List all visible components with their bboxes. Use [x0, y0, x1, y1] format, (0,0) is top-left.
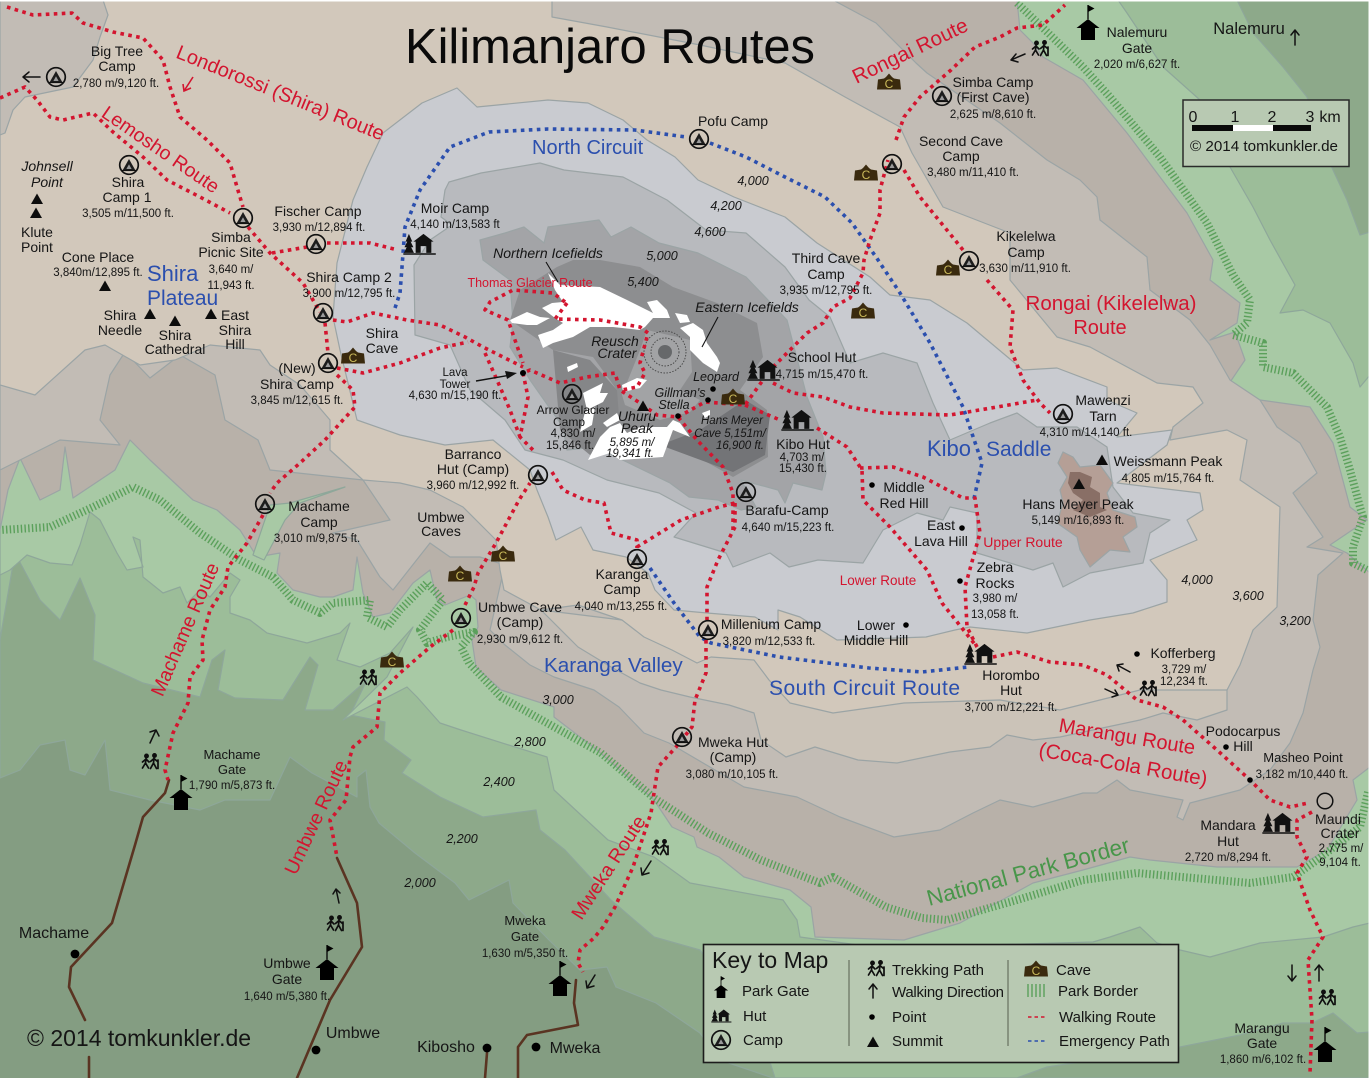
route names: Lemosho Route: [97, 102, 223, 198]
camp: Big Tree: 2,780 m/9,120 ft.: [73, 78, 159, 90]
camp: Arrow Glacier: 15,846 ft.: [546, 440, 594, 452]
label: Reusch Crater: Reusch: [591, 333, 639, 349]
camp: Kikelelwa: 3,630 m/11,910 ft.: [979, 263, 1071, 275]
camp: New Shira Camp: 3,845 m/12,615 ft.: [251, 395, 343, 407]
peak: East Shira Hill: Shira: [219, 322, 252, 338]
camp: Barafu: [737, 483, 834, 534]
point: Masheo Point: Masheo Point: [1263, 750, 1343, 765]
caves: Umbwe Caves: [417, 509, 515, 583]
camp: Second Cave: Second Cave: [919, 133, 1003, 149]
camp: New Shira Camp: Shira Camp: [260, 376, 334, 392]
point: Lower Middle Hill: Middle Hill: [844, 632, 908, 648]
peak: Weissmann: 4,805 m/15,764 ft.: [1122, 473, 1214, 485]
key: park gate: Park Gate: [742, 983, 810, 1000]
point: Zebra Rocks: 3,980 m/: [973, 593, 1018, 605]
peak: Shira Cathedral: Cathedral: [145, 341, 205, 357]
caves: Umbwe Caves: C: [499, 549, 508, 563]
route names: Lower Route: [840, 573, 916, 588]
camp: Mweka Hut: [673, 728, 778, 781]
point: East Lava Hill: [914, 517, 968, 549]
key to map panel: Key to Map: [712, 947, 828, 973]
point: Kofferberg: 3,729 m/: [1162, 664, 1207, 676]
scale bar panel: km: [1319, 109, 1341, 126]
peak: East Shira Hill: [205, 307, 252, 352]
camp: Fischer: 3,930 m/12,894 ft.: [273, 222, 365, 234]
route names: Mweka Route: [567, 812, 651, 924]
route names: Upper Route: [983, 534, 1063, 550]
town: Machame: [19, 925, 89, 958]
point: East Lava Hill: Lava Hill: [914, 533, 968, 549]
camp: Shira Camp 2: [303, 269, 395, 322]
camp: Simba Picnic Site: Simba: [211, 229, 251, 245]
key: park border: Park Border: [1058, 983, 1138, 1000]
camp: Third Cave: Third Cave: [792, 250, 860, 266]
camp: Arrow Glacier: Camp: [553, 415, 585, 429]
camp: Machame: Machame: [288, 498, 350, 514]
gate: Marangu: Gate: [1247, 1035, 1277, 1051]
altitude labels: 2,000: [403, 876, 436, 890]
point: Middle Red Hill: Middle: [883, 479, 925, 495]
point: Middle Red Hill: [869, 479, 929, 511]
route names: Umbwe Route: [280, 757, 353, 878]
altitude labels: 4,000: [737, 174, 769, 188]
crater: Maundi: 9,104 ft.: [1319, 857, 1361, 869]
hut: Horombo: 3,700 m/12,221 ft.: [965, 702, 1057, 714]
gate: Mweka: [482, 913, 595, 996]
camp: Simba Picnic Site: Picnic Site: [198, 244, 264, 260]
camp: Kikelelwa: Kikelelwa: [996, 228, 1056, 244]
gate: Umbwe: 1,640 m/5,380 ft.: [244, 991, 330, 1003]
gate: Umbwe: Gate: [272, 971, 302, 987]
altitude labels: 3,200: [1279, 614, 1311, 628]
gate: Mweka: Gate: [511, 929, 539, 944]
town: Kibosho: Kibosho: [417, 1039, 475, 1056]
camp: Shira Camp 1: Camp 1: [102, 189, 152, 205]
route names: [97, 14, 1209, 924]
camp: Kikelelwa: Camp: [1007, 244, 1045, 260]
peak: East Shira Hill: Hill: [225, 336, 245, 352]
camp: Shira Camp 1: Shira: [112, 174, 145, 190]
camp: Simba Camp: [933, 74, 1036, 121]
summit: Uhuru Peak: [606, 400, 656, 460]
peak: Hans Meyer: Hans Meyer Peak: [1022, 496, 1135, 512]
camp: Millenium: [699, 616, 821, 648]
hut: Kibo Hut: 4,703 m/: [780, 452, 825, 464]
camp: Second Cave: C: [862, 168, 871, 182]
altitude labels: 3,000: [542, 693, 574, 707]
camp: Shira Camp 2: Shira Camp 2: [306, 269, 392, 285]
gate: Marangu: [1220, 1020, 1336, 1066]
hut: Horombo: Hut: [1000, 682, 1022, 698]
gate: Nalemuru: Nalemuru: [1107, 24, 1167, 40]
peaks: Johnsell and Klute: [20, 158, 74, 255]
camp: Simba Picnic Site: 3,640 m/: [209, 264, 254, 276]
camp: Mweka Hut: 3,080 m/10,105 ft.: [686, 769, 778, 781]
route names: Thomas Glacier Route: [467, 276, 593, 290]
key: trekking path: Trekking Path: [892, 962, 984, 979]
peak: Shira Needle: Needle: [98, 322, 142, 338]
key: cave: Cave: [1056, 962, 1091, 979]
key: cave: C: [1032, 964, 1041, 978]
camp: Mweka Hut: (Camp): [710, 749, 756, 765]
points: Gillman's and Stella: [654, 386, 711, 419]
scale bar panel: 2: [1268, 109, 1277, 126]
hut: Moir Camp: [403, 200, 501, 254]
peaks: Johnsell and Klute: Klute: [21, 224, 53, 240]
route names: Machame Route: [147, 560, 224, 700]
camp: New Shira Camp: (New): [278, 360, 316, 376]
point: Lava Tower: Lava: [443, 367, 468, 379]
camp: Umbwe Cave: Umbwe Cave: [478, 599, 562, 615]
altitude labels: 5,400: [627, 275, 659, 289]
label: Reusch Crater: [591, 333, 639, 361]
key: emergency path: Emergency Path: [1059, 1033, 1170, 1050]
camp: Simba Picnic Site: 11,943 ft.: [207, 280, 255, 292]
caves: Umbwe Caves: Caves: [421, 523, 461, 539]
peak: East Shira Hill: East: [221, 307, 249, 323]
point: Kofferberg: 12,234 ft.: [1160, 676, 1208, 688]
peaks: Johnsell and Klute: Point: [31, 174, 64, 190]
point: Lava Tower: 4,630 m/15,190 ft.: [409, 390, 501, 402]
trekking direction: Umbwe: [328, 889, 343, 930]
title: Kilimanjaro Routes: [405, 20, 815, 74]
camp: Second Cave: [854, 133, 1019, 182]
national park border label: National Park Border: [924, 833, 1133, 911]
point: Lava Tower: Tower: [440, 379, 471, 391]
hut: School Hut: [747, 349, 868, 381]
key: walking direction: Walking Direction: [892, 984, 1004, 1001]
key: hut: [711, 1008, 767, 1025]
town: Umbwe: Umbwe: [326, 1025, 380, 1042]
key: point: [869, 1009, 927, 1026]
caves: Umbwe Caves: C: [456, 569, 465, 583]
peak: Shira Cathedral: Shira: [159, 327, 192, 343]
camp: Umbwe Cave: 2,930 m/9,612 ft.: [477, 634, 563, 646]
hut: Mandara: [1185, 813, 1295, 864]
camp: Simba Camp: (First Cave): [956, 89, 1030, 105]
camp: Umbwe Cave: (Camp): [497, 614, 543, 630]
camp: Pofu: [690, 113, 768, 148]
gate: Marangu: Marangu: [1234, 1020, 1290, 1036]
point: Leopard: [693, 370, 740, 392]
caves: Umbwe Caves: Umbwe: [417, 509, 465, 525]
altitude labels: 4,600: [694, 225, 726, 239]
trekking direction: Marangu lower: [1288, 965, 1335, 1004]
altitude labels: 4,200: [710, 199, 742, 213]
trekking direction: Marangu upper: [1105, 664, 1156, 697]
summit: Uhuru Peak: 5,895 m/: [610, 437, 656, 449]
peak: Cone Place: [53, 249, 143, 291]
point: Kofferberg: Kofferberg: [1150, 645, 1216, 661]
altitude labels: 4,000: [1181, 573, 1213, 587]
peak: Cone Place: 3,840m/12,895 ft.: [53, 267, 143, 279]
camp: Shira Camp 2: 3,900 m/12,795 ft.: [303, 288, 395, 300]
town: Nalemuru: [1213, 20, 1299, 45]
camp: Umbwe Cave: [452, 599, 563, 646]
camp: Karanga: [575, 550, 667, 613]
cave and trekkers on Umbwe Route: [360, 652, 404, 684]
blue region labels: Plateau: [147, 287, 218, 310]
label: Reusch Crater: Crater: [598, 345, 638, 361]
scale bar panel: 0: [1189, 109, 1198, 126]
trekking direction: Nalemuru: [1011, 41, 1048, 62]
trekking direction: Machame: [142, 730, 159, 768]
camp: Arrow Glacier: Arrow Glacier: [537, 403, 609, 417]
point: Lower Middle Hill: Lower: [857, 617, 895, 633]
point: Zebra Rocks: Zebra: [977, 559, 1013, 575]
route names: Rongai (Kikelelwa): [1026, 292, 1196, 315]
camp: Barafu: Barafu-Camp: [745, 502, 829, 518]
camp: Fischer: [273, 203, 365, 253]
camp: New Shira Camp: [251, 354, 343, 407]
camp: Mweka Hut: Mweka Hut: [698, 734, 768, 750]
camp: Third Cave: [780, 250, 875, 320]
label: Eastern Icefields: [695, 299, 799, 347]
camp: Kikelelwa: [936, 228, 1071, 277]
cave on Rongai Route: C: [885, 77, 894, 91]
trekking direction: Mweka: [641, 840, 668, 875]
camp: Karanga: Camp: [603, 581, 641, 597]
blue region labels: Kibo: [927, 436, 971, 461]
camp: Barranco: Hut (Camp): [437, 461, 509, 477]
camp: Second Cave: Camp: [942, 148, 980, 164]
camp: Simba Camp: Simba Camp: [953, 74, 1034, 90]
peaks: Johnsell and Klute: Johnsell: [20, 158, 74, 174]
key: park gate: [714, 976, 810, 1000]
cave: Shira Cave: Cave: [366, 340, 399, 356]
gate: Nalemuru: Gate: [1122, 40, 1152, 56]
cave: Shira Cave: C: [349, 351, 358, 365]
camp: Mawenzi Tarn: [1040, 392, 1132, 439]
route names: Rongai Route: [849, 14, 972, 89]
blue region labels: Saddle: [986, 438, 1051, 461]
camp: Barranco: 3,960 m/12,992 ft.: [427, 480, 519, 492]
key: summit: [867, 1033, 944, 1050]
camp: Arrow Glacier: 4,830 m/: [551, 428, 596, 440]
gate: Umbwe: [244, 945, 338, 1003]
cave: Hans Meyer: 16,900 ft.: [716, 440, 764, 452]
camp: Karanga: 4,040 m/13,255 ft.: [575, 601, 667, 613]
camp: Machame: [256, 495, 360, 545]
copyright: © 2014 tomkunkler.de: [27, 1025, 251, 1051]
camp: Shira Camp 1: [82, 156, 174, 220]
blue region labels: Karanga Valley: [544, 654, 683, 677]
camp: Third Cave: 3,935 m/12,795 ft.: [780, 285, 872, 297]
route names: Londorossi (Shira) Route: [173, 42, 387, 145]
summit: Uhuru Peak: Peak: [621, 420, 654, 436]
point: Middle Red Hill: Red Hill: [879, 495, 929, 511]
hut: Horombo: [964, 644, 1057, 714]
altitude labels: 5,000: [646, 249, 678, 263]
blue region labels: Shira: [147, 261, 199, 286]
key to map panel: [704, 944, 1178, 1062]
camp: Barranco: Barranco: [445, 446, 502, 462]
hut: School Hut: 4,715 m/15,470 ft.: [776, 369, 868, 381]
camp: Big Tree: [23, 43, 159, 90]
gate: Nalemuru: 2,020 m/6,627 ft.: [1094, 59, 1180, 71]
scale bar panel: [1183, 100, 1349, 166]
crater: Maundi: [1315, 793, 1364, 869]
route names: Route: [1073, 317, 1127, 339]
gate: Umbwe: Umbwe: [263, 955, 311, 971]
blue region labels: [147, 137, 1051, 700]
blue region labels: North Circuit: [532, 137, 644, 159]
hut: Horombo: Horombo: [982, 667, 1040, 683]
gate: Machame: Gate: [218, 762, 246, 777]
cave: Shira Cave: [341, 325, 399, 365]
camp: Second Cave: 3,480 m/11,410 ft.: [927, 167, 1019, 179]
key: walking route: Walking Route: [1059, 1009, 1156, 1026]
hut: Kibo Hut: 15,430 ft.: [779, 463, 827, 475]
label: Eastern Icefields: Eastern Icefields: [695, 299, 799, 315]
label: Northern Icefields: [493, 245, 603, 282]
arrow: Londorossi direction: [183, 77, 193, 91]
points: Gillman's and Stella: Stella: [658, 398, 690, 412]
point: Masheo Point: [1247, 750, 1348, 783]
label: Northern Icefields: Northern Icefields: [493, 245, 603, 261]
camp: Pofu: Pofu Camp: [698, 113, 768, 129]
peak: Shira Needle: Shira: [104, 307, 137, 323]
point: Masheo Point: 3,182 m/10,440 ft.: [1256, 769, 1348, 781]
crater: Maundi: Maundi: [1315, 811, 1361, 827]
route names: Marangu Route: [1057, 715, 1197, 759]
hut: Mandara: Mandara: [1200, 817, 1256, 833]
key: summit: Summit: [892, 1033, 944, 1050]
gate: Marangu: 1,860 m/6,102 ft.: [1220, 1054, 1306, 1066]
gate: Nalemuru: [1076, 5, 1180, 71]
summit: Uhuru Peak: 19,341 ft.: [606, 448, 654, 460]
peak: Shira Needle: [98, 307, 156, 338]
altitude labels: 2,800: [513, 735, 546, 749]
crater: Maundi: Crater: [1321, 825, 1360, 841]
cave and trekkers on Umbwe Route: C: [388, 655, 397, 669]
peak: Shira Cathedral: [145, 316, 205, 357]
town: Mweka: Mweka: [550, 1040, 600, 1057]
camp: Mawenzi Tarn: 4,310 m/14,140 ft.: [1040, 427, 1132, 439]
key: cave: [1024, 960, 1091, 979]
town: Nalemuru: Nalemuru: [1213, 20, 1285, 38]
hut: Moir Camp: Moir Camp: [421, 200, 489, 216]
camp: Big Tree: Camp: [98, 58, 136, 74]
gate: Mweka: Mweka: [504, 913, 546, 928]
key: camp: [712, 1031, 783, 1049]
camp: Barranco: [427, 446, 547, 492]
camp: Kikelelwa: C: [944, 263, 953, 277]
peak: Hans Meyer: 5,149 m/16,893 ft.: [1032, 515, 1124, 527]
altitude labels: 2,200: [445, 832, 478, 846]
town: Umbwe: [312, 1025, 380, 1054]
camp: Millenium: 3,820 m/12,533 ft.: [723, 636, 815, 648]
point: Podocarpus Hill: Podocarpus: [1206, 723, 1280, 739]
summit: Uhuru Peak: Uhuru: [618, 408, 656, 424]
camp: Mawenzi Tarn: Tarn: [1089, 408, 1117, 424]
hut: Mandara: 2,720 m/8,294 ft.: [1185, 852, 1271, 864]
emergency paths: [395, 129, 982, 672]
peak: Weissmann: Weissmann Peak: [1114, 453, 1223, 469]
point: Kofferberg: [1134, 645, 1216, 688]
scale bar panel: 3: [1306, 109, 1315, 126]
point: East Lava Hill: East: [927, 517, 955, 533]
cave: Hans Meyer: Cave 5,151m/: [694, 428, 768, 440]
cave: Hans Meyer: [694, 388, 768, 452]
camp: Barafu: 4,640 m/15,223 ft.: [742, 522, 834, 534]
point: Lower Middle Hill: [844, 617, 909, 648]
camp: Third Cave: Camp: [807, 266, 845, 282]
gate: Machame: [170, 747, 275, 810]
camp: Third Cave: C: [859, 306, 868, 320]
camp: Arrow Glacier: [537, 385, 609, 452]
point: Lava Tower: [409, 367, 526, 402]
blue region labels: South Circuit Route: [769, 677, 960, 700]
peak: Hans Meyer: [1022, 478, 1135, 527]
scale bar panel: 1: [1231, 109, 1240, 126]
glaciers: [510, 273, 720, 460]
camp: Karanga: Karanga: [596, 566, 649, 582]
point: Leopard: Leopard: [693, 370, 740, 384]
hut: School Hut: School Hut: [788, 349, 856, 365]
camp: Fischer: Fischer Camp: [274, 203, 362, 219]
scale bar panel: © 2014 tomkunkler.de: [1190, 138, 1338, 155]
cave on Rongai Route: [877, 74, 901, 91]
camp: Machame: Camp: [300, 514, 338, 530]
peaks: Johnsell and Klute: Point: [21, 239, 53, 255]
point: Zebra Rocks: 13,058 ft.: [971, 609, 1019, 621]
gate: Machame: 1,790 m/5,873 ft.: [189, 780, 275, 792]
peak: Cone Place: Cone Place: [62, 249, 134, 265]
route names: (Coca-Cola Route): [1037, 738, 1209, 791]
camp: Millenium: Millenium Camp: [721, 616, 821, 632]
brown access roads: [69, 780, 578, 1078]
key: hut: Hut: [743, 1008, 767, 1025]
Mawenzi massif: [1057, 452, 1137, 567]
altitude labels: [403, 174, 1311, 890]
point: Zebra Rocks: Rocks: [976, 575, 1014, 591]
gate: Machame: Machame: [203, 747, 261, 762]
point: Zebra Rocks: [957, 559, 1019, 621]
hut: Kibo Hut: Kibo Hut: [776, 436, 830, 452]
crater: Maundi: 2,775 m/: [1319, 843, 1364, 855]
point: Podocarpus Hill: Hill: [1233, 738, 1253, 754]
hut: Kibo Hut: [776, 410, 830, 475]
hut: Mandara: Hut: [1217, 833, 1239, 849]
Reusch crater: [622, 330, 700, 420]
peak: Weissmann: [1096, 453, 1223, 485]
camp: Shira Camp 1: 3,505 m/11,500 ft.: [82, 208, 174, 220]
key: camp: Camp: [743, 1032, 783, 1049]
camp: Big Tree: Big Tree: [91, 43, 143, 59]
altitude labels: 2,400: [482, 775, 515, 789]
camp: Mawenzi Tarn: Mawenzi: [1075, 392, 1131, 408]
cave: Hans Meyer: Hans Meyer: [701, 415, 764, 427]
town: Machame: Machame: [19, 925, 89, 942]
cave: Hans Meyer: C: [729, 392, 738, 406]
camp: Machame: 3,010 m/9,875 ft.: [274, 533, 360, 545]
camp: Simba Camp: 2,625 m/8,610 ft.: [950, 109, 1036, 121]
points: Gillman's and Stella: Gillman's: [654, 386, 706, 400]
gate: Mweka: 1,630 m/5,350 ft.: [482, 948, 568, 960]
hut: Moir Camp: 4,140 m/13,583 ft: [410, 219, 501, 231]
altitude labels: 3,600: [1232, 589, 1264, 603]
point: Podocarpus Hill: [1206, 723, 1280, 754]
key: point: Point: [892, 1009, 927, 1026]
camp: Simba Picnic Site: [198, 209, 264, 292]
cave: Shira Cave: Shira: [366, 325, 399, 341]
